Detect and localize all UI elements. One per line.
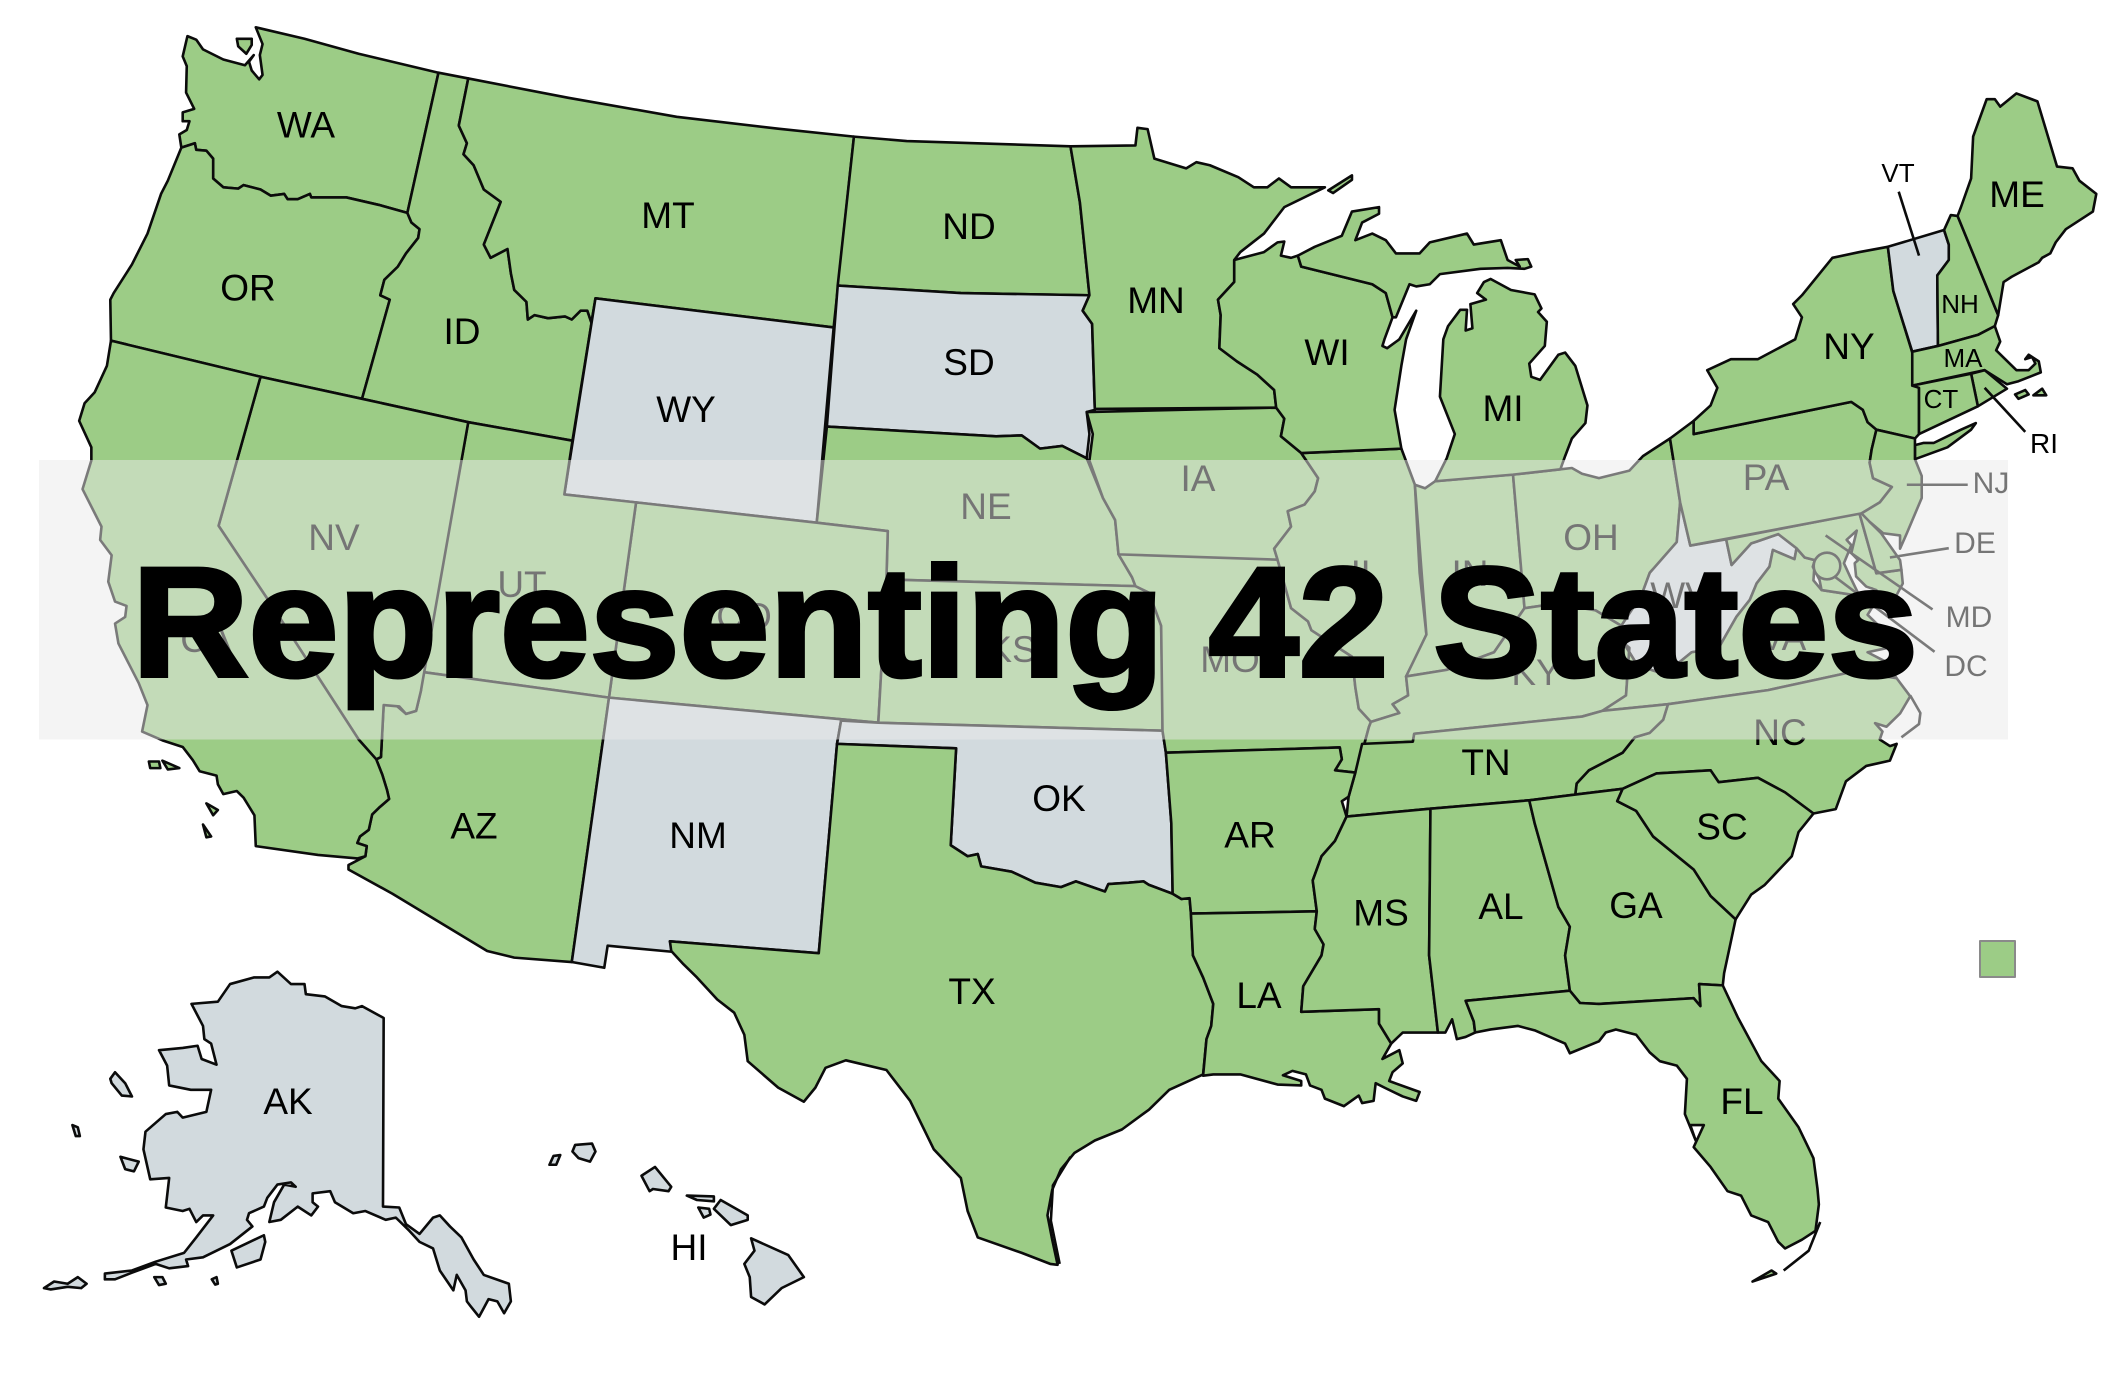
state abbreviation labels: MA (1944, 343, 1983, 373)
state abbreviation labels: FL (1720, 1081, 1764, 1122)
state: Kansas (878, 580, 1163, 731)
state abbreviation labels: CO (716, 596, 772, 637)
state: Alabama (1429, 800, 1570, 1039)
state: Colorado (609, 502, 888, 723)
icon: DC marker circle (1814, 553, 1840, 579)
banner: translucent band behind title (39, 460, 2008, 740)
state abbreviation labels: IL (1351, 553, 1381, 594)
state abbreviation labels: ID (444, 311, 480, 352)
state: Rhode Island (1971, 370, 2007, 406)
state abbreviation labels: AL (1478, 886, 1524, 927)
state abbreviation labels: NM (669, 815, 727, 856)
state abbreviation labels: SD (943, 342, 995, 383)
state: Ohio (1513, 438, 1680, 626)
state: Wisconsin (1218, 241, 1416, 453)
state: New Jersey (1861, 430, 1922, 549)
state: Idaho (362, 73, 595, 441)
state: South Dakota (827, 286, 1095, 458)
state abbreviation labels: GA (1609, 885, 1663, 926)
state abbreviation labels: OR (220, 268, 276, 308)
state: Florida keys (1753, 1222, 1820, 1282)
state abbreviation labels: NH (1941, 289, 1979, 319)
state abbreviation labels: TX (948, 971, 996, 1012)
state: Delaware (1859, 512, 1901, 573)
state abbreviation labels: SC (1696, 807, 1748, 848)
state: Minnesota Isle Royale (1328, 175, 1352, 193)
state abbreviation labels: NC (1753, 712, 1807, 753)
state: North Dakota (838, 137, 1089, 295)
state abbreviation labels: KY (1511, 652, 1561, 693)
state: Iowa (1087, 408, 1318, 560)
state: Maine (1958, 93, 2096, 315)
state: Nevada (219, 377, 468, 759)
state abbreviation labels: NY (1823, 326, 1875, 367)
state: Utah (423, 422, 636, 698)
state abbreviation labels: HI (670, 1227, 708, 1268)
state: Oregon (110, 143, 420, 399)
state abbreviation labels: TN (1461, 742, 1511, 783)
state: North Carolina (1575, 672, 1910, 814)
leader lines for small states (1826, 192, 2025, 652)
state: New York Long Island (1915, 423, 1976, 459)
state abbreviation labels: MN (1127, 280, 1185, 321)
state: New York (1694, 247, 1919, 438)
state abbreviation labels: NJ (1973, 467, 2009, 500)
state: Mississippi (1301, 809, 1438, 1044)
state abbreviation labels: DE (1954, 527, 1996, 560)
state abbreviation labels: LA (1236, 975, 1282, 1016)
state abbreviation labels: MI (1482, 388, 1524, 429)
state: Alaska (105, 972, 511, 1317)
state abbreviation labels: VT (1881, 158, 1915, 188)
legend swatch (1980, 941, 2015, 977)
state: Massachusetts islands (2015, 389, 2046, 399)
state: West Virginia (1621, 502, 1797, 674)
state: Hawaii (549, 1144, 804, 1304)
state abbreviation labels: AK (263, 1081, 313, 1122)
state abbreviation labels: MD (1946, 601, 1992, 634)
state: Tennessee (1347, 704, 1668, 817)
state: Washington island (237, 39, 252, 54)
state: Oklahoma (837, 721, 1173, 894)
state: South Carolina (1617, 770, 1813, 919)
state abbreviation labels: AZ (450, 806, 498, 847)
state abbreviation labels: CA (180, 619, 232, 660)
state abbreviation labels: OH (1563, 517, 1619, 558)
state: Montana (459, 78, 854, 327)
state abbreviation labels: NE (960, 486, 1012, 527)
state: Illinois (1274, 449, 1426, 722)
state: Indiana (1406, 475, 1525, 676)
state: New Hampshire (1937, 215, 1998, 346)
state: Alaska islands (44, 1072, 265, 1289)
state: Massachusetts (1912, 326, 2041, 386)
state: California (79, 341, 389, 858)
state abbreviation labels: PA (1743, 457, 1790, 498)
state: Washington (179, 27, 438, 213)
state abbreviation labels: MS (1353, 893, 1409, 934)
state abbreviation labels: ME (1989, 174, 2045, 215)
state abbreviation labels: WA (277, 104, 335, 146)
state: Missouri (1119, 549, 1371, 773)
state abbreviation labels (180, 104, 2058, 1268)
state abbreviation labels: WV (1650, 575, 1710, 616)
state abbreviation labels: UT (497, 564, 547, 605)
state abbreviation labels: CT (1924, 384, 1958, 414)
state: Nebraska (817, 427, 1135, 586)
state: California channel islands (149, 761, 218, 837)
state abbreviation labels: ND (942, 206, 996, 247)
state: Arizona (348, 672, 609, 962)
state: New Mexico (572, 698, 878, 968)
state abbreviation labels: KS (987, 629, 1037, 670)
state: North Carolina outer banks (1901, 695, 1920, 737)
state abbreviation labels: NV (308, 517, 360, 558)
state: Louisiana (1191, 911, 1420, 1106)
state: Georgia (1529, 789, 1736, 1006)
state abbreviation labels: AR (1224, 815, 1276, 856)
state: Florida (1466, 984, 1819, 1248)
state abbreviation labels: MO (1200, 639, 1260, 680)
state: Virginia (1602, 548, 1897, 711)
title: Representing 42 States (132, 536, 1918, 710)
state: Pennsylvania (1670, 402, 1892, 546)
state: Michigan lower peninsula (1435, 279, 1587, 481)
water: Chesapeake Bay (1844, 531, 1876, 602)
state abbreviation labels: WI (1304, 332, 1350, 373)
state abbreviation labels: WY (656, 389, 716, 430)
state abbreviation labels: IN (1452, 553, 1488, 594)
state: Arkansas (1166, 747, 1355, 914)
state abbreviation labels: DC (1944, 650, 1988, 683)
state: Maryland (1726, 513, 1903, 602)
state abbreviation labels: IA (1181, 458, 1216, 499)
state abbreviation labels: VA (1760, 617, 1807, 658)
state: Wyoming (564, 298, 834, 523)
state: Kentucky (1364, 604, 1629, 745)
state: Connecticut (1912, 374, 1978, 434)
state: Vermont (1888, 230, 1949, 352)
state: Texas barrier islands (1051, 1157, 1070, 1264)
state abbreviation labels: MT (641, 195, 695, 236)
state: Michigan upper peninsula (1298, 207, 1531, 317)
state abbreviation labels: RI (2030, 428, 2058, 459)
state: Minnesota (1070, 128, 1325, 409)
state abbreviation labels: OK (1032, 778, 1086, 819)
state: Texas (670, 744, 1213, 1265)
